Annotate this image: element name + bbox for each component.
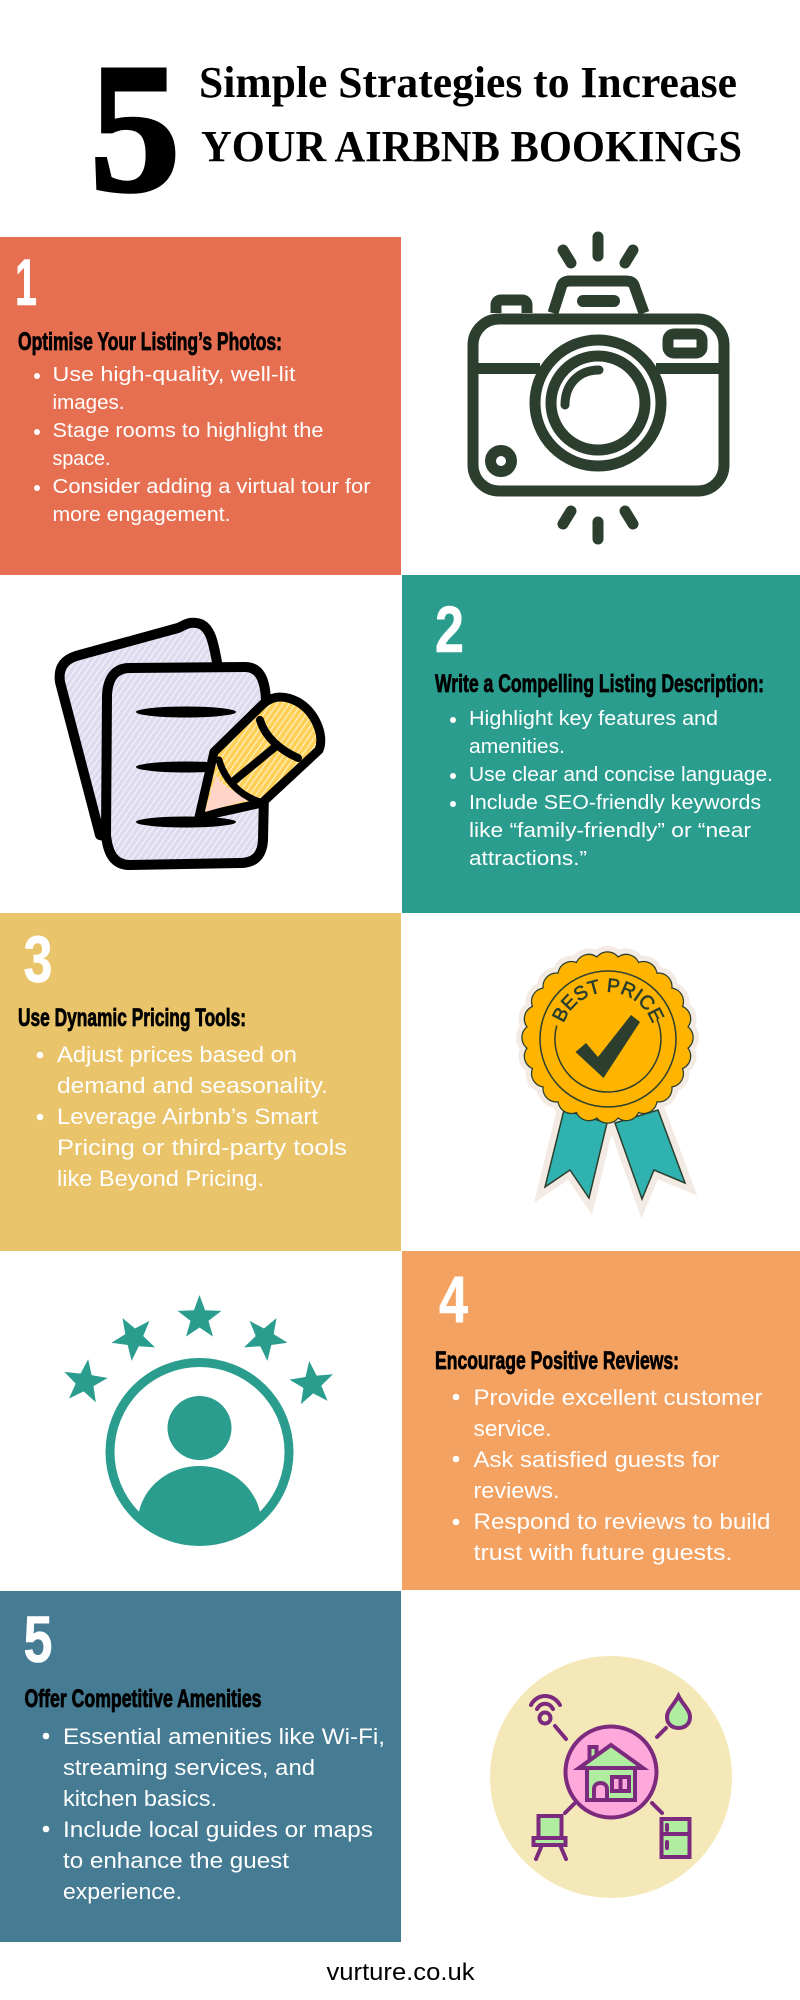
camera band bbox=[473, 363, 724, 374]
back sheet bbox=[60, 623, 218, 840]
bullet list: step 4 bbox=[453, 1385, 770, 1565]
chair bbox=[534, 1816, 566, 1859]
ribbon halo bbox=[545, 1110, 685, 1199]
bullet list: step 5: experience. bbox=[63, 1879, 182, 1904]
heading: step 3: Use Dynamic Pricing Tools: bbox=[18, 1004, 246, 1032]
ribbons bbox=[545, 1110, 685, 1199]
house bbox=[579, 1745, 643, 1800]
bullet list: step 3: like Beyond Pricing. bbox=[57, 1166, 264, 1191]
bullet list: step 5: streaming services, and bbox=[63, 1755, 315, 1780]
bullet list: step 1: Stage rooms to highlight the bbox=[52, 420, 324, 442]
bullet list: step 2: Use clear and concise language. bbox=[469, 764, 773, 786]
bullet list: step 5 bbox=[43, 1724, 385, 1904]
heading: step 1: Optimise Your Listing’s Photos: bbox=[18, 328, 282, 356]
footer url: vurture.co.uk bbox=[326, 1959, 476, 1986]
flash window bbox=[668, 334, 702, 353]
title line 2: YOUR AIRBNB BOOKINGS bbox=[201, 122, 742, 171]
badge rosette bbox=[522, 952, 693, 1123]
camera rays bbox=[563, 237, 633, 539]
number 5: 5 bbox=[24, 1602, 52, 1676]
lens highlight bbox=[565, 370, 599, 405]
bullet list: step 4: Respond to reviews to build bbox=[474, 1509, 770, 1534]
icon: camera bbox=[473, 237, 724, 539]
fridge bbox=[662, 1819, 690, 1857]
indicator dot bbox=[490, 450, 512, 472]
bullet list: step 1: more engagement. bbox=[52, 504, 230, 526]
panel: step 2 description bbox=[402, 575, 800, 913]
icon: best price badge bbox=[516, 946, 699, 1218]
bullet list: step 3 bbox=[37, 1042, 347, 1191]
water drop bbox=[667, 1696, 690, 1728]
badge arc text bbox=[564, 992, 650, 1023]
bullet list: step 2: attractions.” bbox=[469, 848, 587, 870]
number 3: 3 bbox=[24, 922, 52, 996]
badge halo bbox=[522, 952, 693, 1123]
head bbox=[168, 1396, 232, 1460]
bullet list: step 5: Include local guides or maps bbox=[63, 1817, 373, 1842]
camera body bbox=[473, 319, 724, 491]
icon: home amenities bbox=[490, 1656, 732, 1898]
viewfinder bbox=[577, 295, 620, 307]
bullet list: step 3: Pricing or third-party tools bbox=[57, 1135, 347, 1160]
panel: step 1 photos bbox=[0, 237, 401, 575]
bullet list: step 5: to enhance the guest bbox=[63, 1848, 289, 1873]
inner ring bbox=[555, 1019, 661, 1092]
bullet list: step 2: Include SEO-friendly keywords bbox=[469, 792, 761, 814]
heading: step 5: Offer Competitive Amenities bbox=[24, 1685, 262, 1713]
bullet list: step 2: amenities. bbox=[469, 736, 565, 758]
connector lines bbox=[555, 1726, 666, 1813]
stars bbox=[61, 1295, 336, 1405]
number 2: 2 bbox=[435, 592, 464, 666]
bullet list: step 1: images. bbox=[52, 392, 124, 414]
yellow backdrop bbox=[490, 1656, 732, 1898]
panel: step 4 reviews bbox=[402, 1251, 800, 1590]
text lines bbox=[136, 706, 236, 828]
bullet list: step 5: Essential amenities like Wi-Fi, bbox=[63, 1724, 385, 1749]
icon: profile with stars bbox=[61, 1295, 336, 1560]
bullet list: step 4: Ask satisfied guests for bbox=[474, 1447, 720, 1472]
title bbox=[90, 26, 742, 230]
wifi symbol bbox=[531, 1696, 560, 1724]
bullet list: step 4: reviews. bbox=[474, 1478, 560, 1503]
camera top hump bbox=[553, 281, 644, 313]
bullet list: step 1 bbox=[34, 364, 371, 526]
camera shutter button bbox=[496, 300, 527, 313]
bullet list: step 2: like “family-friendly” or “near bbox=[469, 820, 751, 842]
title line 1: Simple Strategies to Increase bbox=[199, 58, 737, 107]
lens rings bbox=[535, 340, 661, 466]
bullet list: step 1: Consider adding a virtual tour for bbox=[52, 476, 371, 498]
outer ring bbox=[540, 971, 676, 1107]
heading: step 4: Encourage Positive Reviews: bbox=[435, 1347, 679, 1375]
shoulders bbox=[139, 1466, 260, 1537]
bullet list: step 4: Provide excellent customer bbox=[474, 1385, 762, 1410]
big numeral 5: 5 bbox=[90, 26, 180, 230]
bullet list: step 1: Use high-quality, well-lit bbox=[52, 364, 296, 386]
bullet list: step 2: Highlight key features and bbox=[469, 708, 718, 730]
bullet list: step 3: Adjust prices based on bbox=[57, 1042, 297, 1067]
bullet list: step 2 bbox=[450, 708, 773, 870]
number 4: 4 bbox=[439, 1262, 468, 1336]
panel: step 3 pricing bbox=[0, 913, 401, 1251]
checkmark bbox=[576, 1015, 640, 1078]
bullet list: step 1: space. bbox=[52, 448, 110, 470]
number 1: 1 bbox=[15, 245, 37, 319]
bullet list: step 4: service. bbox=[474, 1416, 552, 1441]
pink hub bbox=[566, 1726, 656, 1818]
pencil bbox=[199, 697, 321, 817]
panel: step 5 amenities bbox=[0, 1591, 401, 1942]
bullet list: step 3: demand and seasonality. bbox=[57, 1073, 328, 1098]
bullet list: step 5: kitchen basics. bbox=[63, 1786, 217, 1811]
icon: notes and pencil bbox=[60, 623, 321, 865]
bullet list: step 3: Leverage Airbnb’s Smart bbox=[57, 1104, 318, 1129]
icon: best price badge: BEST PRICE bbox=[552, 978, 665, 1024]
front sheet bbox=[106, 667, 266, 865]
profile ring bbox=[110, 1362, 289, 1542]
bullet list: step 4: trust with future guests. bbox=[474, 1540, 732, 1565]
